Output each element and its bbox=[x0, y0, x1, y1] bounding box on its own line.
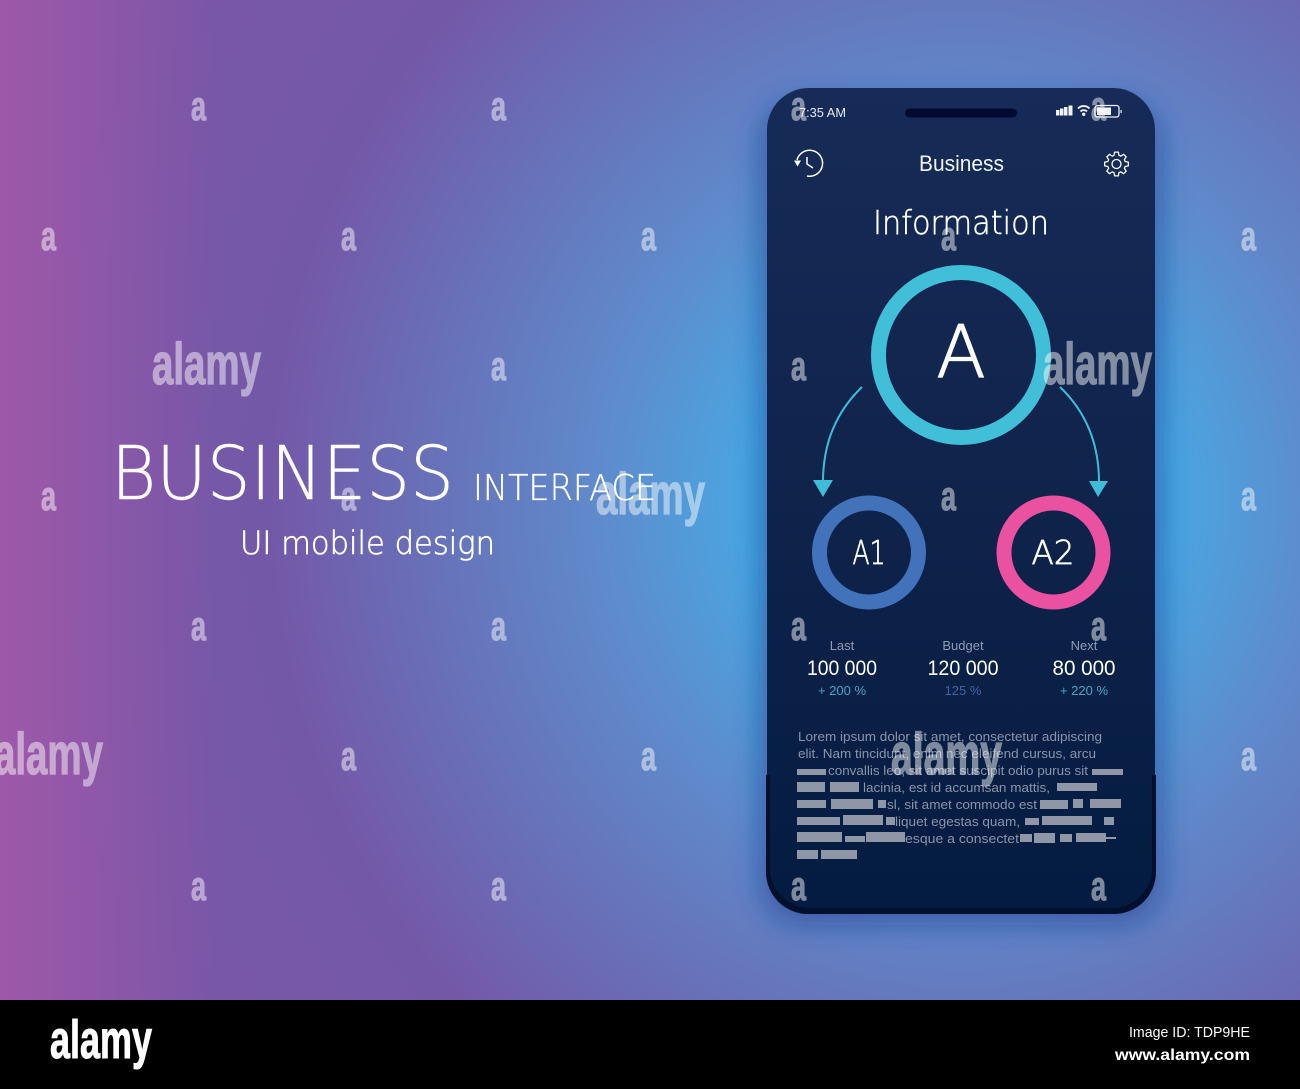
status time: 7:35 AM bbox=[799, 106, 846, 120]
website: www.alamy.com bbox=[1114, 1047, 1250, 1064]
watermark pattern: a bbox=[491, 343, 507, 389]
watermark pattern: a bbox=[1241, 733, 1257, 779]
watermark pattern: a bbox=[191, 603, 207, 649]
watermark pattern: alamy bbox=[1043, 332, 1152, 397]
stat: Next: 80 000 bbox=[1052, 657, 1116, 680]
watermark pattern: a bbox=[641, 733, 657, 779]
stat: Budget: 120 000 bbox=[928, 657, 998, 680]
icon: battery bbox=[1095, 106, 1122, 117]
stat: Budget: Budget bbox=[942, 638, 984, 653]
body paragraph: Lorem ipsum dolor sit amet, consectetur adipiscing bbox=[798, 729, 1102, 744]
body paragraph: convallis leo, sit amet suscipit odio purus sit bbox=[828, 763, 1088, 778]
watermark pattern: alamy bbox=[891, 722, 1002, 787]
watermark pattern: a bbox=[641, 213, 657, 259]
stat: Next bbox=[1052, 638, 1116, 698]
footer bar bbox=[0, 1000, 1300, 1089]
phone screen bbox=[767, 88, 1155, 908]
diagram bbox=[813, 272, 1108, 602]
body paragraph: lacinia, est id accumsan mattis, bbox=[863, 780, 1050, 795]
watermark pattern: a bbox=[341, 733, 357, 779]
body paragraph: esque a consectet bbox=[905, 831, 1019, 846]
stat: Next: + 220 % bbox=[1060, 683, 1108, 698]
headline block bbox=[111, 431, 656, 562]
arrow: A to A1 bbox=[813, 387, 862, 497]
redacted text blocks bbox=[797, 769, 1123, 859]
watermark pattern: a bbox=[491, 603, 507, 649]
watermark pattern: a bbox=[41, 473, 57, 519]
heading: INTERFACE: INTERFACE bbox=[473, 468, 656, 509]
watermark pattern: a bbox=[941, 473, 957, 519]
watermark pattern: a bbox=[491, 83, 507, 129]
stat: Budget bbox=[928, 638, 998, 698]
phone shadow bbox=[760, 100, 1162, 925]
watermark pattern: a bbox=[341, 473, 357, 519]
subheading: UI mobile design bbox=[240, 524, 495, 562]
body paragraph: sl, sit amet commodo est bbox=[887, 797, 1037, 812]
phone bottom edge bbox=[766, 775, 1156, 914]
watermark pattern: a bbox=[791, 603, 807, 649]
watermark pattern: a bbox=[791, 863, 807, 909]
body paragraph: elit. Nam tincidunt, enim nec eleifend cursus, arcu bbox=[798, 746, 1096, 761]
stat: Last bbox=[807, 638, 877, 698]
node A2 bbox=[1004, 503, 1103, 602]
phone bbox=[760, 88, 1162, 925]
watermark pattern: a bbox=[341, 213, 357, 259]
watermark pattern: a bbox=[1241, 473, 1257, 519]
screen heading: Information bbox=[873, 203, 1049, 242]
watermark pattern: a bbox=[791, 343, 807, 389]
watermark pattern: a bbox=[1091, 863, 1107, 909]
watermark pattern: alamy bbox=[152, 332, 261, 397]
watermark pattern: a bbox=[1091, 83, 1107, 129]
watermark pattern: a bbox=[791, 83, 807, 129]
stat: Budget: 125 % bbox=[945, 683, 982, 698]
icon: history clock bbox=[794, 150, 823, 176]
icon: wifi bbox=[1078, 106, 1090, 115]
watermark pattern: a bbox=[491, 863, 507, 909]
watermark pattern: a bbox=[191, 863, 207, 909]
icon: settings gear bbox=[1105, 152, 1128, 176]
watermark pattern: a bbox=[941, 213, 957, 259]
node A1 bbox=[820, 503, 918, 602]
image id: Image ID: TDP9HE bbox=[1129, 1024, 1250, 1041]
stat: Next: Next bbox=[1071, 638, 1098, 653]
body paragraph bbox=[797, 729, 1123, 859]
icon: signal bbox=[1056, 106, 1072, 116]
arrow: A to A2 bbox=[1060, 387, 1108, 497]
stat: Last: + 200 % bbox=[818, 683, 866, 698]
watermark pattern: a bbox=[1241, 213, 1257, 259]
footer logo: alamy bbox=[50, 1010, 152, 1070]
body paragraph: liquet egestas quam, bbox=[895, 814, 1020, 829]
speaker notch bbox=[905, 108, 1017, 118]
node A: A bbox=[936, 310, 986, 394]
nav title: Business bbox=[919, 151, 1004, 176]
heading: BUSINESS: BUSINESS bbox=[111, 431, 454, 517]
watermark pattern: a bbox=[191, 83, 207, 129]
node A1: A1 bbox=[852, 533, 886, 572]
node A bbox=[878, 272, 1044, 438]
watermark pattern: a bbox=[1091, 603, 1107, 649]
stat: Last: Last bbox=[830, 638, 855, 653]
watermark pattern: a bbox=[41, 213, 57, 259]
node A2: A2 bbox=[1032, 533, 1074, 572]
stat: Last: 100 000 bbox=[807, 657, 877, 680]
watermark pattern: alamy bbox=[596, 462, 705, 527]
